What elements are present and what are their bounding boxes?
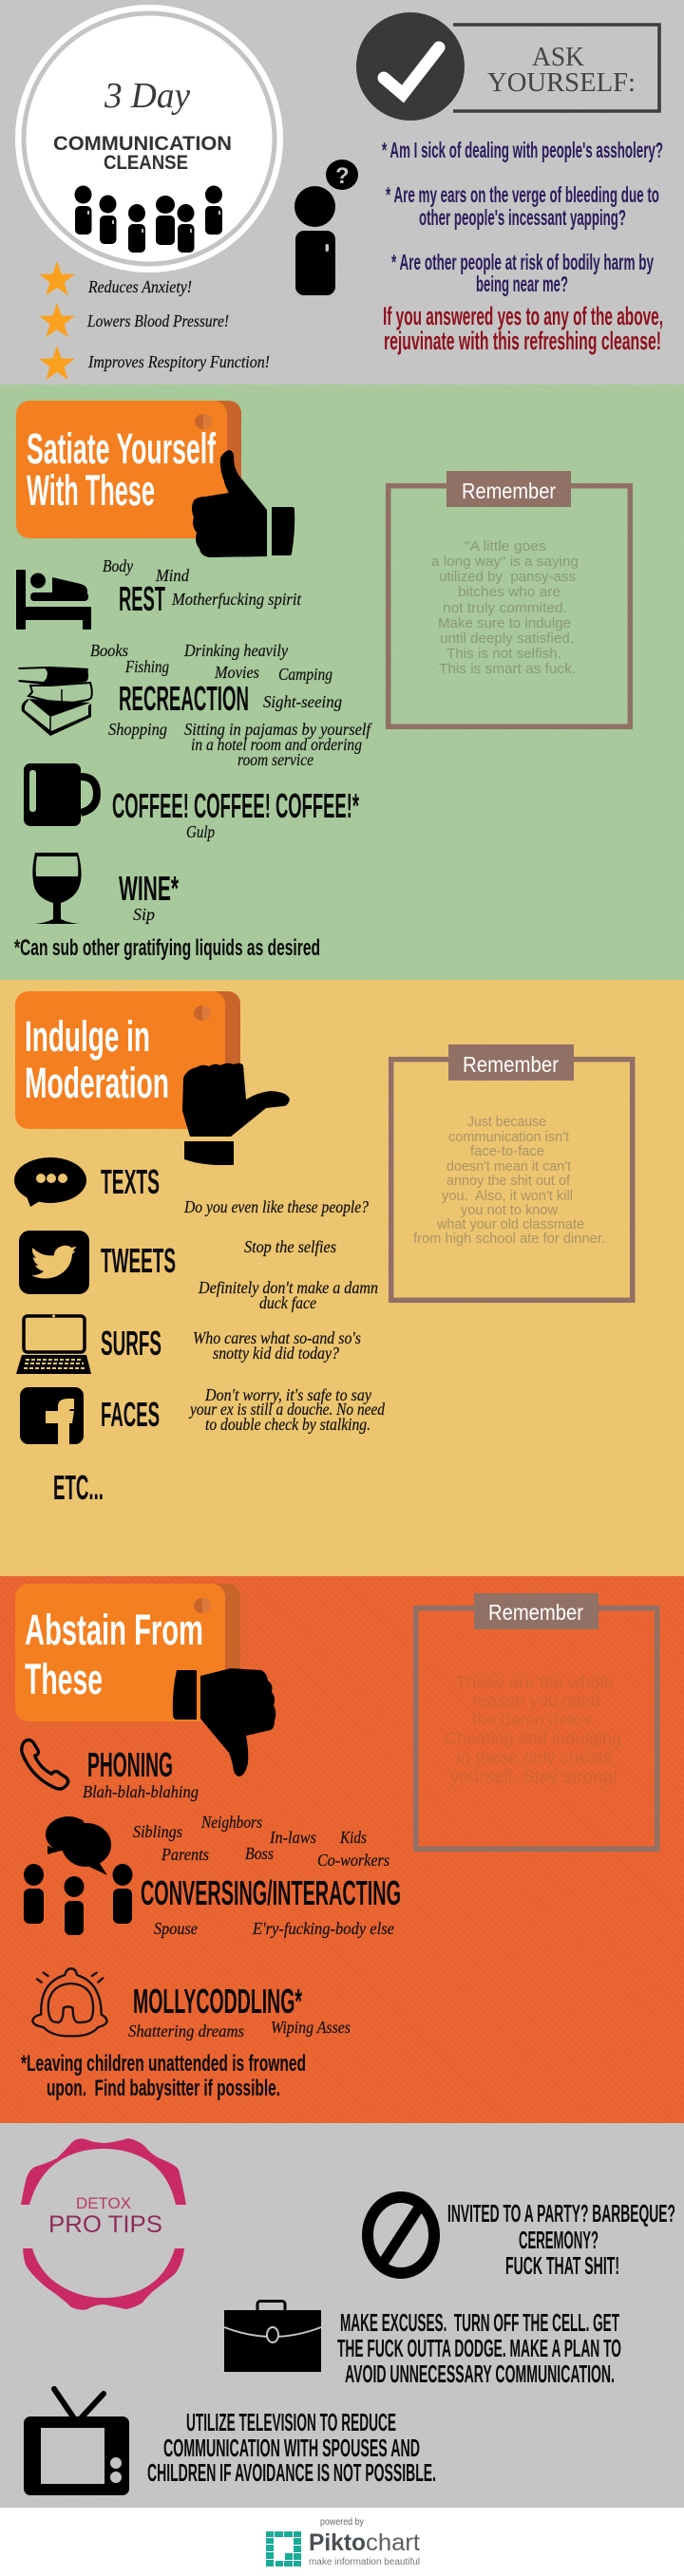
- icon: laptop: [16, 1314, 91, 1374]
- icon: potty seat: [32, 1968, 106, 2036]
- callout text: utilized by pansy-ass: [439, 569, 576, 585]
- text block: questions: [382, 138, 663, 296]
- footer: piktochart credit: make information beautiful: [309, 2557, 420, 2567]
- callout text: in these only cheats: [457, 1748, 612, 1767]
- callout text: communication isn't: [448, 1129, 570, 1145]
- callout text: you. Also, it won't kill: [442, 1188, 573, 1204]
- item: rest: [103, 556, 302, 618]
- heading tag: abstain from these: Abstain From: [25, 1606, 203, 1654]
- item: recreaction: Camping: [278, 665, 332, 684]
- item: phoning: [83, 1745, 199, 1801]
- icon: crowd of people: [74, 186, 222, 253]
- callout: remember: [389, 471, 630, 726]
- item: texts: Do you even like these people?: [183, 1197, 369, 1216]
- item: surfs: SURFS: [101, 1324, 162, 1363]
- item: mollycoddling: [128, 1982, 351, 2040]
- callout text: from high school ate for dinner.: [413, 1231, 605, 1247]
- item: etc: ETC...: [53, 1468, 104, 1507]
- callout text: bitches who are: [458, 584, 560, 600]
- icon: person with question bubble: ?: [335, 163, 350, 189]
- callout text: until deeply satisfied.: [440, 630, 574, 647]
- icon: piktochart logo: [266, 2531, 301, 2567]
- heading tag: satiate yourself: Satiate Yourself: [27, 424, 217, 473]
- item: recreaction: room service: [238, 750, 314, 769]
- badge: detox pro tips: DETOX: [76, 2194, 131, 2212]
- item: faces: your ex is still a douche. No need: [188, 1400, 386, 1419]
- callout: remember: [391, 1044, 633, 1300]
- callout text: Make sure to indulge: [438, 615, 571, 631]
- callout text: [431, 538, 579, 677]
- item: wine: Sip: [133, 905, 155, 924]
- footer: piktochart credit: chart: [366, 2529, 420, 2556]
- heading tag: satiate yourself: [16, 401, 241, 538]
- item: wine: [119, 869, 179, 924]
- item: conversing: [133, 1813, 401, 1938]
- icon: phone: [22, 1739, 68, 1789]
- item: mollycoddling: Shattering dreams: [128, 2021, 244, 2040]
- panel: abstain: [15, 1584, 657, 2101]
- item: tweets: TWEETS: [101, 1241, 176, 1280]
- item: conversing: In-laws: [269, 1828, 316, 1847]
- heading: ask yourself: ASK: [532, 43, 584, 72]
- callout text: [413, 1114, 605, 1247]
- callout text: Cheating and indulging: [445, 1729, 621, 1748]
- item: mollycoddling: Wiping Asses: [271, 2018, 351, 2037]
- footnote: babysitter: upon. Find babysitter if possible.: [47, 2076, 280, 2101]
- callout text: doesn't mean it can't: [446, 1158, 572, 1175]
- heading tag: abstain from these: These: [25, 1655, 103, 1703]
- footnote: liquids: *Can sub other gratifying liquids as desired: [14, 935, 320, 961]
- item: recreaction: [90, 641, 373, 769]
- heading: ask yourself: YOURSELF:: [487, 68, 636, 98]
- tip: television: CHILDREN IF AVOIDANCE IS NOT POSSIBLE.: [147, 2458, 436, 2487]
- callout text: the damn detox.: [472, 1710, 596, 1729]
- item: phoning: PHONING: [87, 1745, 173, 1784]
- item: conversing: Siblings: [133, 1822, 182, 1841]
- icon: briefcase: [224, 2302, 321, 2372]
- tip: party: [447, 2199, 675, 2280]
- callout: remember: Remember: [488, 1600, 583, 1625]
- item: recreaction: RECREACTION: [119, 679, 249, 718]
- icon: television: [24, 2389, 129, 2495]
- item: coffee: Gulp: [186, 822, 215, 841]
- item: recreaction: Fishing: [124, 657, 169, 676]
- callout text: reason you need: [472, 1691, 600, 1710]
- panel: intro: [15, 5, 663, 380]
- item: recreaction: Drinking heavily: [183, 641, 288, 660]
- icon: thumb sideways: [182, 1063, 290, 1165]
- callout text: This is not selfish.: [446, 646, 561, 662]
- item: recreaction: Sight-seeing: [263, 692, 342, 711]
- footer: piktochart credit: Pikto: [309, 2529, 366, 2556]
- item: conversing: E'ry-fucking-body else: [252, 1919, 394, 1938]
- badge: detox pro tips: PRO TIPS: [48, 2211, 162, 2238]
- heading tag: abstain from these: [15, 1584, 240, 1721]
- item: surfs: [101, 1324, 361, 1363]
- item: conversing: Co-workers: [317, 1851, 390, 1870]
- item: tweets: [101, 1237, 378, 1312]
- callout text: not truly commited.: [443, 600, 567, 616]
- item: faces: Don't worry, it's safe to say: [204, 1385, 371, 1404]
- item: mollycoddling: MOLLYCODDLING*: [133, 1982, 302, 2021]
- heading tag: indulge in moderation: Indulge in: [25, 1012, 150, 1061]
- item: texts: TEXTS: [101, 1162, 160, 1201]
- item: recreaction: Books: [90, 641, 128, 660]
- item: conversing: Spouse: [154, 1919, 198, 1938]
- item: rest: Body: [103, 556, 133, 575]
- panel: indulge: [14, 991, 633, 1507]
- icon: stars and benefits list: Improves Respitory Function!: [87, 352, 270, 371]
- tip: television: [147, 2408, 436, 2487]
- callout: remember: Remember: [462, 479, 556, 503]
- title: communication cleanse: COMMUNICATION: [53, 133, 232, 155]
- item: phoning: Blah-blah-blahing: [83, 1782, 199, 1801]
- item: recreaction: Shopping: [108, 720, 167, 739]
- callout: remember: [416, 1593, 657, 1849]
- footnote: babysitter: [21, 2051, 306, 2101]
- callout text: yourself. Stay strong!: [450, 1767, 618, 1786]
- icon: prohibited sign: [368, 2197, 434, 2273]
- item: faces: to double check by stalking.: [205, 1415, 370, 1434]
- tip: excuses: [337, 2308, 621, 2388]
- footer: piktochart credit: powered by: [320, 2517, 364, 2528]
- icon: speech bubble: [14, 1157, 86, 1207]
- item: surfs: Who cares what so-and so's: [193, 1328, 361, 1347]
- footer: piktochart credit: [266, 2517, 420, 2567]
- icon: facebook: [20, 1387, 84, 1444]
- item: rest: Mind: [155, 566, 190, 585]
- item: recreaction: Movies: [214, 663, 259, 682]
- heading tag: indulge in moderation: [15, 991, 240, 1129]
- item: rest: Motherfucking spirit: [171, 590, 302, 609]
- icon: books: [18, 667, 92, 736]
- callout text: a long way" is a saying: [431, 554, 579, 570]
- callout text: These are the whole: [456, 1673, 614, 1692]
- icon: wine glass: [32, 853, 82, 924]
- item: faces: [101, 1385, 386, 1434]
- title badge circle: [15, 5, 283, 273]
- callout text: Just because: [467, 1114, 546, 1130]
- icon: conversing people: [24, 1816, 133, 1935]
- callout text: This is smart as fuck.: [439, 661, 576, 677]
- title: communication cleanse: CLEANSE: [104, 152, 188, 174]
- callout text: annoy the shit out of: [446, 1173, 571, 1189]
- badge: detox pro tips: [21, 2138, 186, 2310]
- item: tweets: Stop the selfies: [244, 1237, 336, 1256]
- item: faces: FACES: [101, 1395, 160, 1434]
- item: coffee: COFFEE! COFFEE! COFFEE!*: [112, 786, 359, 825]
- item: coffee: [112, 786, 359, 841]
- item: conversing: Neighbors: [200, 1813, 262, 1832]
- item: conversing: Parents: [161, 1845, 209, 1864]
- icon: thumbs up: [192, 450, 294, 557]
- callout: remember: Remember: [463, 1052, 559, 1077]
- item: surfs: snotty kid did today?: [213, 1344, 339, 1363]
- icon: person with question bubble: [294, 160, 358, 295]
- icon: stars and benefits list: Reduces Anxiety!: [87, 277, 192, 296]
- callout: rejuvinate: [383, 302, 663, 355]
- text block: questions: being near me?: [476, 272, 568, 296]
- item: conversing: Boss: [245, 1844, 274, 1863]
- item: conversing: CONVERSING/INTERACTING: [141, 1873, 401, 1912]
- item: tweets: Definitely don't make a damn: [198, 1278, 378, 1297]
- icon: stars and benefits list: Lowers Blood Pressure!: [86, 311, 229, 330]
- callout text: what your old classmate: [436, 1216, 584, 1232]
- item: tweets: duck face: [259, 1293, 316, 1312]
- callout text: [445, 1673, 621, 1786]
- icon: twitter: [19, 1231, 89, 1294]
- heading tag: indulge in moderation: Moderation: [25, 1059, 169, 1107]
- footnote: babysitter: *Leaving children unattended is frowned: [21, 2051, 306, 2077]
- icon: coffee mug: [24, 763, 97, 826]
- panel: satiate: [14, 401, 630, 961]
- panel: pro tips: [21, 2138, 675, 2495]
- callout text: face-to-face: [470, 1143, 544, 1159]
- item: texts: [101, 1162, 369, 1216]
- tip: television: UTILIZE TELEVISION TO REDUCE: [186, 2408, 396, 2436]
- item: rest: REST: [119, 579, 165, 618]
- callout text: you not to know: [461, 1202, 558, 1218]
- item: conversing: Kids: [339, 1828, 367, 1847]
- icon: stars and benefits list: [39, 261, 270, 380]
- callout text: "A little goes: [465, 538, 546, 555]
- item: recreaction: in a hotel room and ordering: [191, 735, 362, 754]
- title: communication cleanse: [53, 133, 232, 174]
- item: recreaction: Sitting in pajamas by yourself: [184, 720, 373, 739]
- icon: bed: [16, 570, 91, 630]
- tip: party: CEREMONY?: [519, 2226, 598, 2254]
- heading tag: satiate yourself: With These: [27, 466, 155, 515]
- heading: ask yourself: [356, 12, 659, 121]
- title: 3 Day: 3 Day: [104, 76, 190, 116]
- icon: thumbs down: [173, 1668, 276, 1777]
- item: wine: WINE*: [119, 869, 179, 908]
- tip: television: COMMUNICATION WITH SPOUSES AND: [163, 2434, 420, 2462]
